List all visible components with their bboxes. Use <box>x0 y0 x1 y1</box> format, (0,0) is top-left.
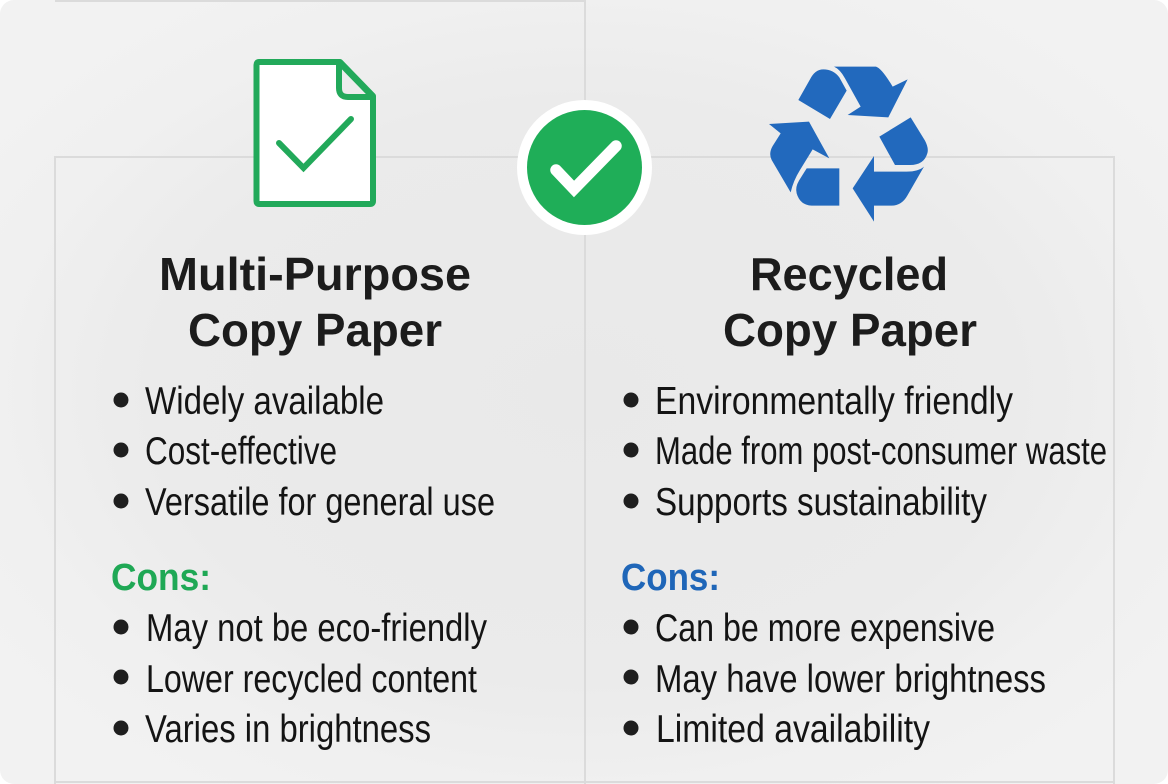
pros list: Supports sustainability <box>655 481 988 524</box>
icon: recycling symbol <box>769 67 928 222</box>
cons list: Varies in brightness <box>145 708 431 751</box>
cons list: Lower recycled content <box>146 658 477 701</box>
pros list <box>114 380 495 524</box>
pros list: Cost-effective <box>145 430 337 473</box>
cons heading: Cons: <box>621 557 720 599</box>
pros list <box>624 380 1107 524</box>
heading: multi-purpose copy paper: Copy Paper <box>188 304 442 356</box>
pros list: Widely available <box>145 380 384 423</box>
cons list <box>624 607 1046 751</box>
pros list: Environmentally friendly <box>655 380 1014 423</box>
heading: multi-purpose copy paper: Multi-Purpose <box>159 248 471 300</box>
cons heading: Cons: <box>111 557 211 599</box>
heading: multi-purpose copy paper <box>159 248 471 356</box>
heading: recycled copy paper: Recycled <box>750 248 948 300</box>
panel: multi-purpose copy paper <box>111 248 495 751</box>
cons list: Can be more expensive <box>655 607 995 650</box>
cons list: May not be eco-friendly <box>146 607 488 650</box>
cons list: May have lower brightness <box>655 658 1046 701</box>
icon: green document with check mark <box>256 62 373 204</box>
icon: central green check badge <box>517 100 652 235</box>
heading: recycled copy paper <box>723 248 977 356</box>
heading: recycled copy paper: Copy Paper <box>723 304 977 356</box>
panel: recycled copy paper <box>621 248 1107 751</box>
cons list <box>114 607 488 751</box>
cons list: Limited availability <box>656 708 931 751</box>
pros list: Versatile for general use <box>145 481 495 524</box>
